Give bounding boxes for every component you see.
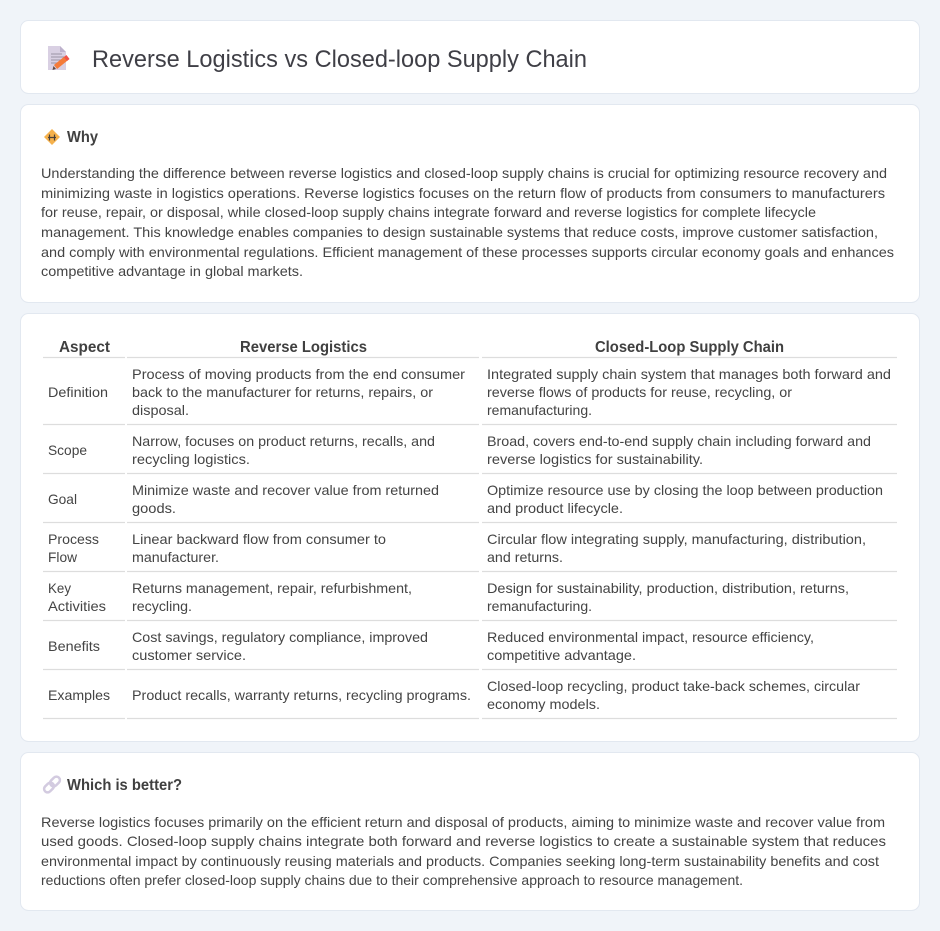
- row: key activities: remanufacturing.: [487, 598, 592, 614]
- row: key activities: recycling.: [132, 598, 192, 614]
- row: scope: recycling logistics.: [132, 451, 250, 467]
- row: benefits: Reduced environmental impact, resource efficiency,: [487, 629, 814, 645]
- panel: which is better: [20, 752, 920, 910]
- text block: which is better: used goods. Closed-loop supply chains integrate both forward and reverse logistics to create a sustainable system that reduces: [41, 833, 886, 849]
- row: benefits: Benefits: [48, 638, 100, 654]
- row: definition: Definition: [48, 384, 108, 400]
- row: benefits: customer service.: [132, 647, 246, 663]
- row: examples: Closed-loop recycling, product take-back schemes, circular: [487, 678, 860, 694]
- row: key activities: Design for sustainability, production, distribution, returns,: [487, 580, 849, 596]
- row: scope: Scope: [48, 442, 87, 458]
- row: scope: Narrow, focuses on product returns, recalls, and: [132, 433, 435, 449]
- row: definition: remanufacturing.: [487, 402, 592, 418]
- panel: comparison table: [20, 314, 920, 742]
- row: goal: [48, 482, 883, 516]
- heading: which is better: Which is better?: [67, 777, 182, 794]
- row: definition: disposal.: [132, 402, 189, 418]
- text block: which is better: environmental impact by continuously reusing materials and products. Companies seeking long-term sustainability benefits and cost: [41, 853, 879, 869]
- row: scope: [48, 433, 871, 467]
- text block: why: management. This knowledge enables companies to design sustainable systems that reduce costs, improve customer satisfaction,: [41, 224, 878, 240]
- panel: header: [20, 20, 920, 94]
- table header: Closed-Loop Supply Chain: [595, 339, 784, 356]
- text block: why: minimizing waste in logistics operations. Reverse logistics focuses on the return flow of products from consumers to manufacturers: [41, 185, 885, 201]
- table header: [59, 339, 784, 356]
- row: scope: Broad, covers end-to-end supply chain including forward and: [487, 433, 871, 449]
- row: examples: economy models.: [487, 696, 600, 712]
- row: examples: [48, 678, 860, 712]
- text block: why: and comply with environmental regulations. Efficient management of these processes supports circular economy goals and enhances: [41, 244, 894, 260]
- row: process flow: Flow: [48, 549, 78, 565]
- row: process flow: Linear backward flow from consumer to: [132, 531, 386, 547]
- row: process flow: manufacturer.: [132, 549, 219, 565]
- row: scope: reverse logistics for sustainability.: [487, 451, 703, 467]
- text block: why: for reuse, repair, or disposal, while closed-loop supply chains integrate forward and reverse logistics for complete lifecycle: [41, 204, 816, 220]
- row: goal: goods.: [132, 500, 176, 516]
- row: examples: Product recalls, warranty returns, recycling programs.: [132, 687, 471, 703]
- row: process flow: Process: [48, 531, 99, 547]
- text block: which is better: Reverse logistics focuses primarily on the efficient return and disposal of products, aiming to minimize waste and recover value from: [41, 814, 885, 830]
- row: goal: Goal: [48, 491, 77, 507]
- text block: why: [41, 165, 894, 279]
- row: process flow: [48, 531, 866, 565]
- text block: why: competitive advantage in global markets.: [41, 263, 303, 279]
- row: key activities: Activities: [48, 598, 106, 614]
- row: goal: Optimize resource use by closing the loop between production: [487, 482, 883, 498]
- icon: memo with pencil: [48, 46, 68, 70]
- text block: why: Understanding the difference between reverse logistics and closed-loop supply chains is crucial for optimizing resource recovery and: [41, 165, 887, 181]
- text block: which is better: reductions often prefer closed-loop supply chains due to their comprehensive approach to resource management.: [41, 872, 743, 888]
- row: process flow: and returns.: [487, 549, 563, 565]
- row: key activities: [48, 580, 849, 614]
- text block: which is better: [41, 814, 886, 888]
- row: definition: back to the manufacturer for returns, repairs, or: [132, 384, 433, 400]
- table header: Reverse Logistics: [240, 339, 367, 356]
- row: benefits: [48, 629, 814, 663]
- row: goal: Minimize waste and recover value from returned: [132, 482, 439, 498]
- icon: link: [43, 775, 61, 794]
- row: definition: Integrated supply chain system that manages both forward and: [487, 366, 891, 382]
- panel: why: [20, 104, 920, 302]
- table header: Aspect: [59, 339, 111, 356]
- row: key activities: Returns management, repair, refurbishment,: [132, 580, 412, 596]
- row: definition: Process of moving products from the end consumer: [132, 366, 465, 382]
- row: benefits: Cost savings, regulatory compliance, improved: [132, 629, 428, 645]
- title: Reverse Logistics vs Closed-loop Supply Chain: [92, 46, 587, 73]
- row: process flow: Circular flow integrating supply, manufacturing, distribution,: [487, 531, 866, 547]
- row: examples: Examples: [48, 687, 110, 703]
- row: benefits: competitive advantage.: [487, 647, 636, 663]
- row: definition: reverse flows of products for reuse, recycling, or: [487, 384, 792, 400]
- row: key activities: Key: [48, 580, 71, 596]
- row: goal: and product lifecycle.: [487, 500, 623, 516]
- row: definition: [48, 366, 891, 418]
- icon: diamond sign: [44, 129, 60, 145]
- heading: why: Why: [67, 129, 98, 146]
